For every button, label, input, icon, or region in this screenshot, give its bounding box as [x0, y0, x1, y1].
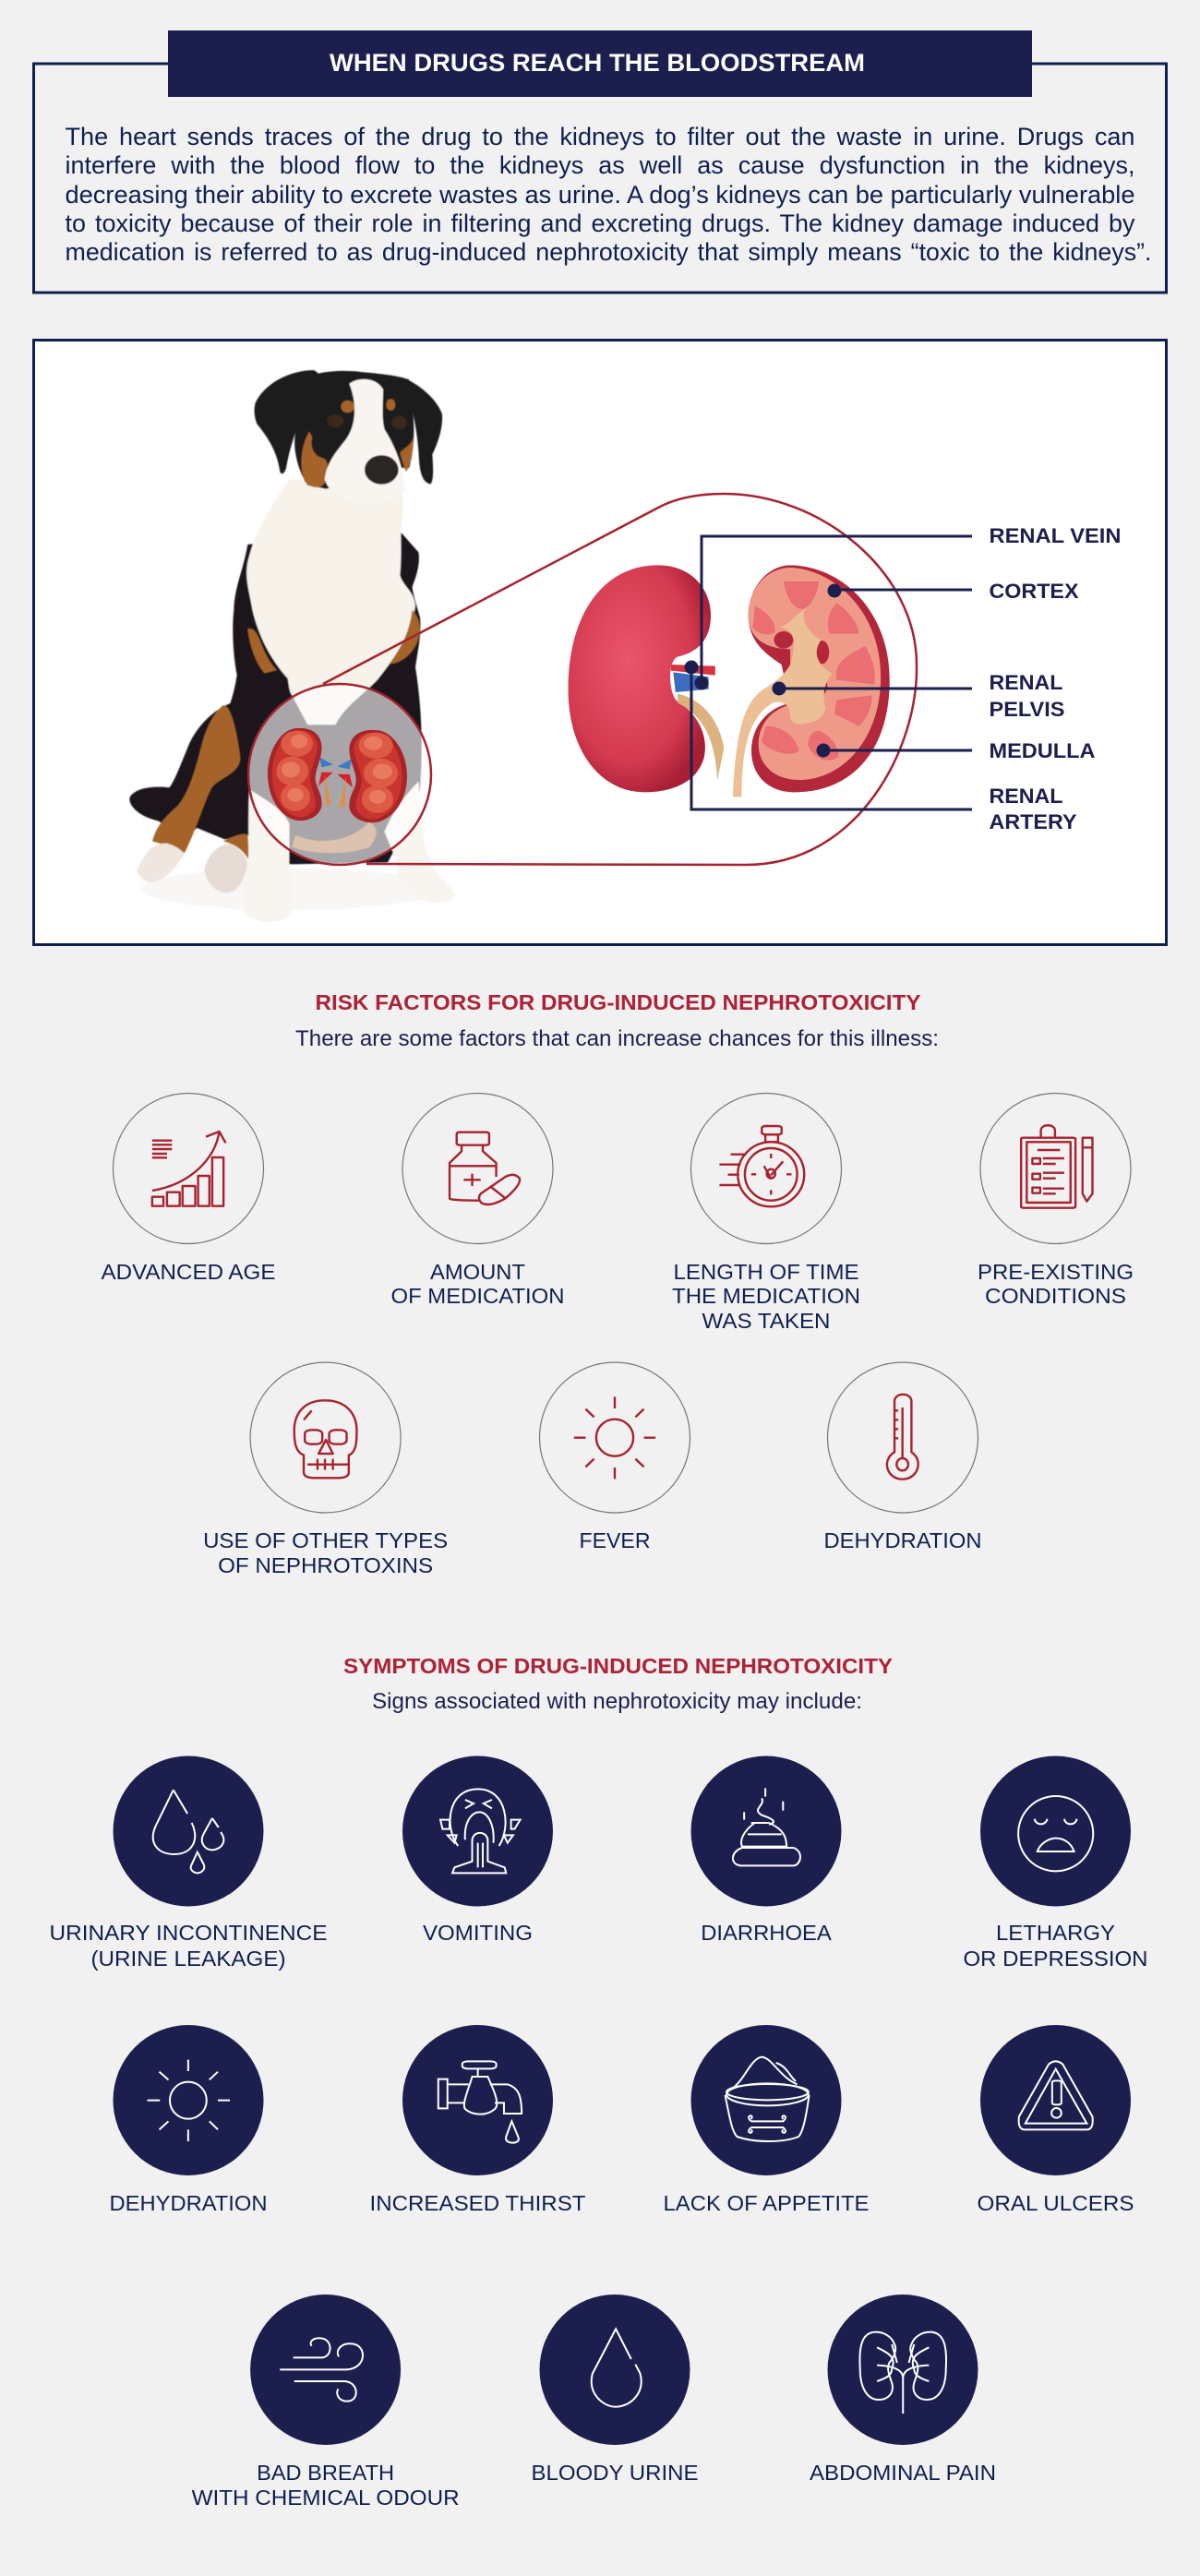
symptom: urinary incontinence: (URINE LEAKAGE) [90, 1947, 286, 1971]
symptom: urinary incontinence: URINARY INCONTINENCE [50, 1921, 327, 1945]
risk: other nephrotoxins: USE OF OTHER TYPES [203, 1528, 448, 1552]
intro paragraph: decreasing their ability to excrete wastes as urine. A dog’s kidneys can be particularly vulnerable [65, 181, 1135, 209]
risk: pre-existing conditions [978, 1093, 1134, 1308]
risk factors heading: RISK FACTORS FOR DRUG-INDUCED NEPHROTOXICITY [316, 990, 921, 1014]
symptom: abdominal pain: ABDOMINAL PAIN [810, 2461, 996, 2485]
callout circle on the dog [248, 684, 431, 865]
anatomy labels [990, 524, 1121, 833]
anatomy labels: MEDULLA [990, 739, 1096, 762]
symptom: lethargy: LETHARGY [996, 1921, 1115, 1945]
risk: length of time [672, 1093, 860, 1333]
intro paragraph: The heart sends traces of the drug to the kidneys to filter out the waste in urine. Drugs can [65, 123, 1135, 150]
intro paragraph: medication is referred to as drug-induced nephrotoxicity that simply means “toxic to the kidneys”. [65, 238, 1152, 266]
whole kidney [569, 565, 724, 792]
risk: advanced age: ADVANCED AGE [102, 1260, 275, 1284]
risk: fever: FEVER [580, 1528, 650, 1552]
risk: amount of medication: OF MEDICATION [391, 1284, 565, 1308]
risk: other nephrotoxins [203, 1362, 448, 1577]
magnifier outline [323, 494, 917, 865]
symptoms heading: SYMPTOMS OF DRUG-INDUCED NEPHROTOXICITY [343, 1654, 893, 1678]
symptom: diarrhoea: DIARRHOEA [701, 1921, 832, 1945]
symptoms subheading: Signs associated with nephrotoxicity may include: [372, 1689, 862, 1714]
symptom: increased thirst: INCREASED THIRST [369, 2191, 585, 2215]
symptom: bad breath [192, 2294, 460, 2510]
risk factors subheading: There are some factors that can increase chances for this illness: [295, 1026, 939, 1051]
symptom: bad breath: BAD BREATH [257, 2461, 394, 2485]
risk: length of time: WAS TAKEN [702, 1309, 831, 1333]
panel: when drugs reach the bloodstream [33, 30, 1167, 293]
risk: pre-existing conditions: PRE-EXISTING [978, 1260, 1134, 1284]
symptom: abdominal pain [810, 2294, 996, 2485]
symptom: lethargy [964, 1755, 1148, 1971]
symptom: urinary incontinence [50, 1755, 327, 1971]
intro paragraph [65, 123, 1152, 266]
intro paragraph: interfere with the blood flow to the kidneys as well as cause dysfunction in the kidneys, [65, 151, 1135, 179]
risk: length of time: THE MEDICATION [672, 1284, 860, 1308]
symptom: dehydration [109, 2025, 268, 2215]
anatomy labels: RENAL [990, 785, 1063, 808]
symptom: lack of appetite: LACK OF APPETITE [663, 2191, 870, 2215]
symptom: vomiting: VOMITING [423, 1921, 533, 1945]
risk: length of time: LENGTH OF TIME [674, 1260, 858, 1284]
risk: dehydration [823, 1362, 982, 1552]
symptom: bloody urine: BLOODY URINE [532, 2461, 698, 2485]
risk: amount of medication [391, 1093, 565, 1308]
panel: dog and kidney anatomy [33, 340, 1167, 945]
symptom: dehydration: DEHYDRATION [109, 2191, 268, 2215]
risk: dehydration: DEHYDRATION [823, 1528, 982, 1552]
illustration: sitting dog [129, 370, 454, 922]
symptom: lack of appetite [663, 2025, 870, 2215]
risk: advanced age [102, 1093, 275, 1284]
kidney cross-section [733, 565, 890, 797]
risk: amount of medication: AMOUNT [430, 1260, 525, 1284]
symptom: bloody urine [532, 2294, 698, 2485]
symptom: vomiting [402, 1755, 553, 1945]
risk: other nephrotoxins: OF NEPHROTOXINS [218, 1553, 433, 1577]
small kidneys in circle [268, 728, 407, 822]
anatomy labels: RENAL [990, 671, 1063, 694]
section: risk factors [102, 990, 1134, 1577]
symptom: oral ulcers: ORAL ULCERS [977, 2191, 1134, 2215]
heading bar: WHEN DRUGS REACH THE BLOODSTREAM [330, 49, 865, 77]
symptom: diarrhoea [690, 1755, 842, 1945]
kidney anatomy illustration [569, 565, 890, 797]
anatomy labels: ARTERY [990, 810, 1077, 833]
symptom: bad breath: WITH CHEMICAL ODOUR [192, 2486, 460, 2510]
anatomy labels: PELVIS [990, 698, 1065, 721]
symptom: oral ulcers [977, 2025, 1134, 2215]
symptom: increased thirst [369, 2025, 585, 2215]
heading bar [168, 30, 1032, 97]
risk: pre-existing conditions: CONDITIONS [985, 1284, 1126, 1308]
anatomy labels: CORTEX [990, 580, 1079, 603]
symptom: lethargy: OR DEPRESSION [964, 1947, 1148, 1971]
leader lines and dots [685, 536, 972, 809]
section: symptoms [50, 1654, 1148, 2510]
risk: fever [539, 1362, 690, 1552]
intro paragraph: to toxicity because of their role in filtering and excreting drugs. The kidney damage induced by [65, 210, 1135, 237]
anatomy labels: RENAL VEIN [990, 524, 1121, 547]
